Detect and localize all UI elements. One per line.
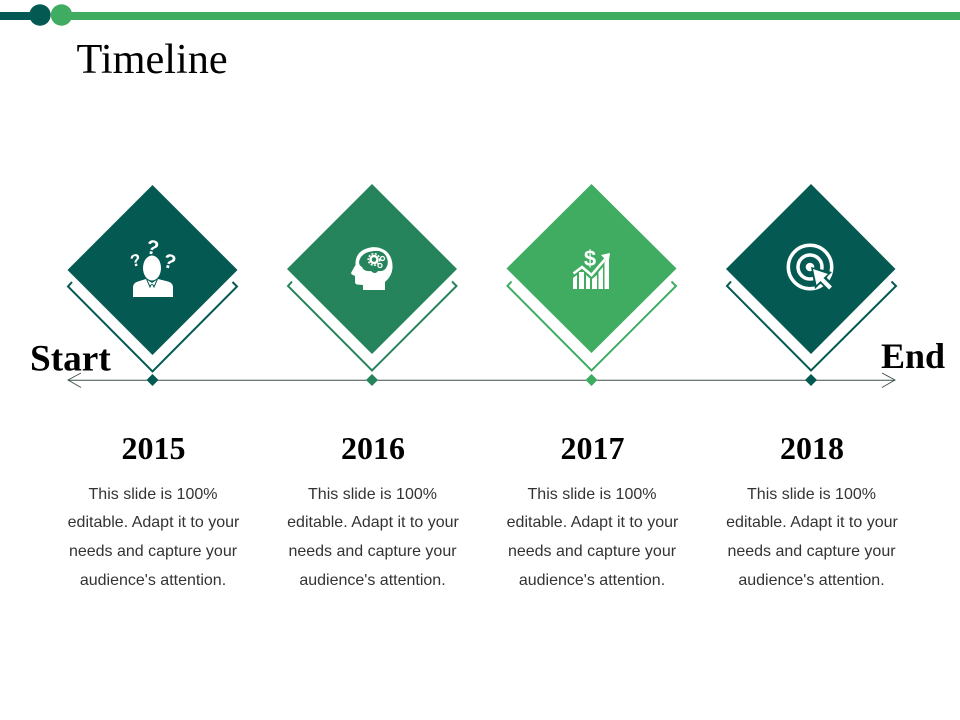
description 2018: needs and capture your [727, 543, 896, 560]
year 2015: 2015 [122, 430, 186, 466]
description 2018: audience's attention. [738, 572, 885, 589]
timeline axis with arrows [68, 373, 895, 388]
milestone 2016 [287, 184, 460, 589]
diamond 2018 [726, 184, 896, 354]
axis marker 2017 [586, 374, 598, 386]
top decorative header bar [0, 4, 960, 26]
diamond 2016 [287, 184, 457, 354]
description 2017 [507, 486, 679, 589]
description 2017: This slide is 100% [528, 486, 656, 503]
description 2015: editable. Adapt it to your [68, 514, 240, 531]
axis marker 2016 [366, 374, 378, 386]
description 2018 [726, 486, 899, 589]
description 2016: audience's attention. [299, 572, 446, 589]
end label: End [881, 336, 945, 376]
axis marker 2018 [805, 374, 817, 386]
icon: rising chart with dollar: $ [584, 246, 596, 271]
milestone 2017 [506, 184, 679, 589]
description 2015: audience's attention. [80, 572, 226, 589]
title: Timeline [76, 36, 228, 83]
icon: rising chart with dollar [573, 246, 610, 289]
description 2018: This slide is 100% [747, 486, 876, 503]
year 2016: 2016 [341, 430, 405, 466]
icon: head with gears [351, 247, 393, 290]
chevron 2016 [288, 282, 456, 370]
year 2018: 2018 [780, 430, 844, 466]
description 2017: editable. Adapt it to your [507, 514, 679, 531]
description 2016: needs and capture your [288, 543, 457, 560]
diamond 2015 [68, 185, 238, 355]
axis marker 2015 [146, 374, 158, 386]
description 2017: audience's attention. [519, 572, 665, 589]
milestone 2018 [726, 184, 899, 589]
milestone 2015 [68, 185, 240, 589]
chevron 2015 [68, 282, 237, 372]
icon: confused person [129, 236, 178, 297]
description 2016: This slide is 100% [308, 486, 437, 503]
start label: Start [30, 338, 111, 380]
description 2016 [287, 486, 460, 589]
diamond 2017 [506, 184, 676, 353]
icon: confused person: ? [144, 236, 161, 260]
description 2016: editable. Adapt it to your [287, 514, 460, 531]
icon: target with cursor [788, 245, 835, 292]
description 2018: editable. Adapt it to your [726, 514, 899, 531]
description 2015: This slide is 100% [89, 486, 217, 503]
description 2017: needs and capture your [508, 543, 677, 560]
chevron 2017 [508, 282, 676, 370]
description 2015: needs and capture your [69, 543, 238, 560]
icon: confused person: ? [129, 250, 143, 271]
year 2017: 2017 [560, 430, 624, 466]
description 2015 [68, 486, 240, 589]
chevron 2018 [727, 282, 896, 370]
icon: confused person: ? [161, 250, 178, 274]
